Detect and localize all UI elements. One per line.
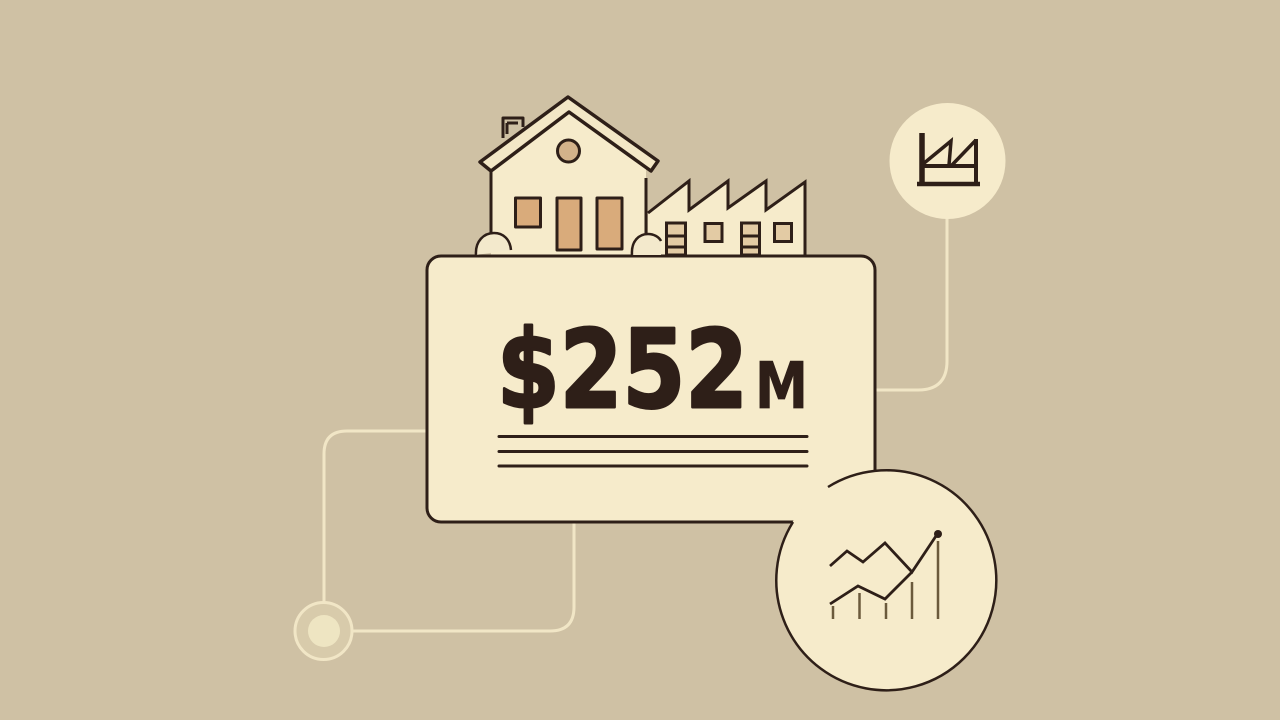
text placeholder lines xyxy=(499,436,807,466)
badge: factory icon circle xyxy=(890,103,1006,219)
icon: right bush outline xyxy=(632,234,661,255)
heading: value $252M: $252 xyxy=(497,308,748,433)
icon: right bush xyxy=(632,234,661,255)
connector: card to top-right factory badge xyxy=(875,215,947,390)
factory roof and wall xyxy=(648,181,805,256)
chart: upper line xyxy=(830,533,938,572)
factory window two xyxy=(774,224,792,242)
heading: value $252M: M xyxy=(755,350,808,424)
door xyxy=(557,198,581,250)
left window xyxy=(516,198,540,227)
factory window one xyxy=(705,224,722,242)
roof xyxy=(480,97,658,171)
panel: main value card xyxy=(427,256,875,522)
chart: end dot xyxy=(934,530,942,538)
icon: left bush xyxy=(476,233,511,255)
icon: house xyxy=(480,97,658,256)
right door xyxy=(597,198,622,249)
connector: looped line from card to node xyxy=(324,431,574,631)
chimney xyxy=(503,118,523,138)
round attic window xyxy=(558,140,580,162)
wall edges xyxy=(491,171,646,233)
icon: factory xyxy=(648,181,805,256)
chart: lower line xyxy=(830,572,912,604)
badge: growth chart circle xyxy=(776,470,996,690)
factory left door xyxy=(666,223,686,255)
node: bottom-left circle xyxy=(295,602,352,660)
house walls xyxy=(491,112,646,256)
factory right door xyxy=(742,223,760,255)
chart: bars xyxy=(833,541,938,619)
icon: small factory xyxy=(917,133,980,185)
